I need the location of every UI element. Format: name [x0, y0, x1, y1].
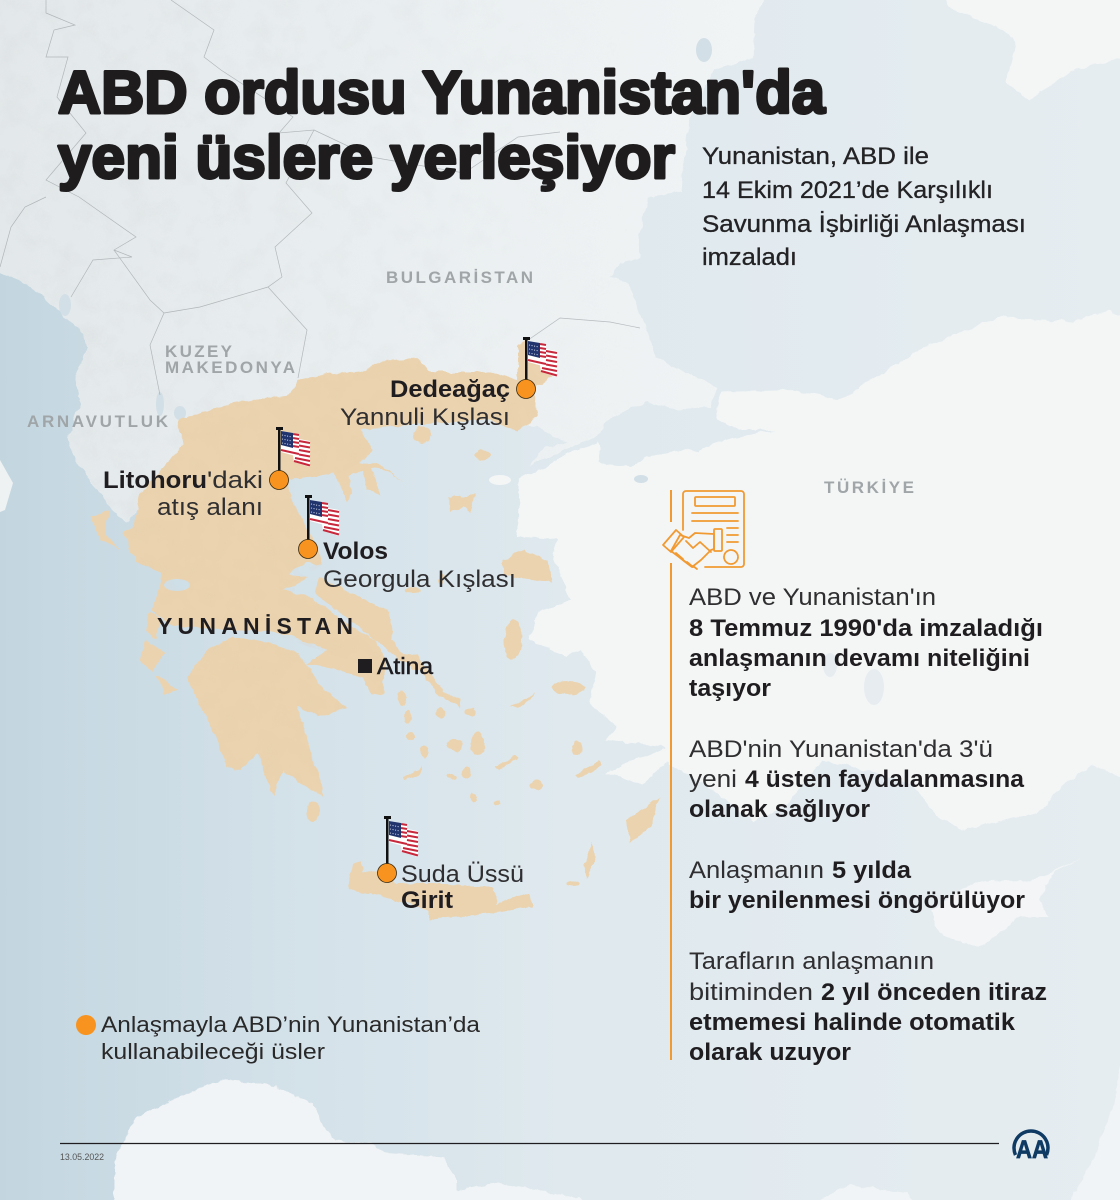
text block: anlaşma: 8 Temmuz 1990'da imzaladığı [689, 615, 1043, 642]
date: 13.05.2022 [60, 1152, 104, 1162]
base: Dedeağaç [340, 337, 557, 431]
footer rule [60, 1142, 999, 1144]
subtitle: Savunma İşbirliği Anlaşması [702, 211, 1026, 238]
base: Litohoru: 'daki [207, 467, 263, 494]
text block: anlaşma: anlaşmanın devamı niteliğini [689, 645, 1030, 672]
text block: yenilenme: Anlaşmanın [689, 857, 824, 884]
land: Africa [114, 1080, 600, 1200]
land: Levant [1060, 1060, 1120, 1200]
text block: üsler: yeni [689, 766, 737, 793]
legend: kullanabileceği üsler [101, 1039, 326, 1064]
subtitle [702, 143, 1026, 271]
base: Suda: Suda Üssü [401, 861, 524, 888]
text block: itiraz [689, 948, 1047, 1066]
borders [0, 0, 640, 395]
text block: üsler [689, 736, 1024, 823]
text block: yenilenme [689, 857, 1025, 914]
legend [76, 1012, 481, 1064]
base: Litohoru [103, 427, 310, 521]
text block: itiraz: bitiminden [689, 979, 813, 1006]
title: yeni üslere yerleşiyor [58, 124, 675, 191]
Greece [90, 338, 660, 920]
orange side line [670, 490, 672, 1060]
text block: üsler: ABD'nin Yunanistan'da 3'ü [689, 736, 993, 763]
icon: agreement handshake [663, 491, 744, 569]
base: Suda [378, 816, 524, 914]
land: Cyprus [931, 857, 1083, 948]
base: Dedeağaç: Yannuli Kışlası [340, 404, 510, 431]
subtitle: Yunanistan, ABD ile [702, 143, 929, 170]
text block: yenilenme: bir yenilenmesi öngörülüyor [689, 887, 1025, 914]
country labels: KUZEY [165, 342, 233, 361]
land: Anatolia [517, 310, 1120, 830]
base: Volos: Volos [323, 538, 388, 565]
land: Italy heel [0, 460, 13, 512]
text block: üsler: 4 üsten faydalanmasına [745, 766, 1024, 793]
country labels [27, 268, 914, 497]
text block: anlaşma: ABD ve Yunanistan'ın [689, 584, 936, 611]
logo: AA: AA [1016, 1136, 1048, 1164]
base: Litohoru: atış alanı [157, 494, 263, 521]
text block: anlaşma [689, 584, 1043, 702]
country labels: BULGARİSTAN [386, 268, 533, 287]
base: Suda: Girit [401, 887, 453, 914]
text block: itiraz: Tarafların anlaşmanın [689, 948, 934, 975]
subtitle: imzaladı [702, 244, 797, 271]
label: Yunanistan: YUNANİSTAN [157, 613, 353, 639]
base: Volos: Georgula Kışlası [323, 566, 516, 593]
capital: Atina [358, 653, 433, 679]
text block: anlaşma: taşıyor [689, 675, 771, 702]
text block: yenilenme: 5 yılda [832, 857, 911, 884]
text block: üsler: olanak sağlıyor [689, 796, 870, 823]
base: Litohoru: Litohoru [103, 467, 207, 494]
text block: itiraz: etmemesi halinde otomatik [689, 1009, 1015, 1036]
land: Crimea [944, 0, 1120, 100]
title: ABD ordusu Yunanistan'da [58, 59, 826, 126]
land: Balkans and Thrace [0, 0, 765, 523]
country labels: MAKEDONYA [165, 358, 295, 377]
subtitle: 14 Ekim 2021’de Karşılıklı [702, 177, 993, 204]
Ambracian gulf [164, 579, 190, 591]
text block: itiraz: olarak uzuyor [689, 1039, 851, 1066]
Imbros [489, 475, 511, 485]
title [58, 59, 826, 191]
base: Dedeağaç: Dedeağaç [390, 376, 510, 403]
legend: Anlaşmayla ABD’nin Yunanistan’da [101, 1012, 481, 1037]
capital: Atina: Atina [377, 653, 433, 679]
country labels: ARNAVUTLUK [27, 412, 169, 431]
lakes [59, 38, 884, 705]
text block: itiraz: 2 yıl önceden itiraz [821, 979, 1047, 1006]
base: Volos [298, 495, 516, 593]
country labels: TÜRKİYE [824, 478, 914, 497]
